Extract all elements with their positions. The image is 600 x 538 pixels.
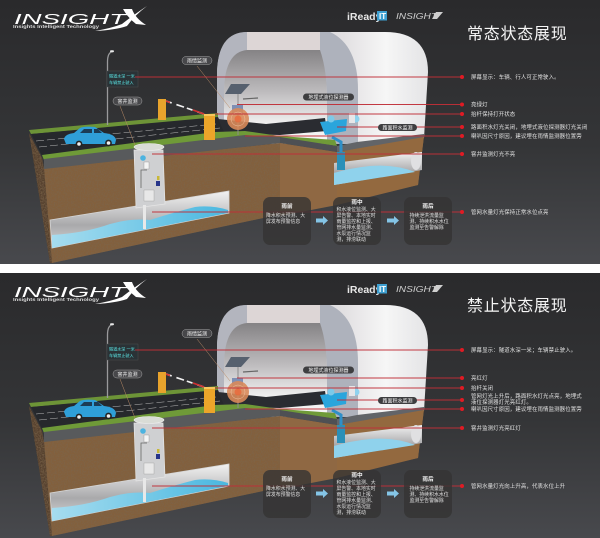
card: before rain: 雨前 xyxy=(281,202,293,210)
callout texts xyxy=(471,346,582,490)
water sensor and pump xyxy=(320,113,360,170)
label: buried level sensor xyxy=(303,366,354,374)
label: road water monitor xyxy=(378,124,417,132)
label: road water monitor: 路面积水监测 xyxy=(382,124,413,132)
callout texts: 窨井监测灯光不亮 xyxy=(471,150,516,158)
road sign: 车辆禁止驶入 xyxy=(109,352,134,358)
road sign: 隧道水深 一米 xyxy=(109,72,135,78)
tunnel hood xyxy=(217,305,428,417)
card: before rain: 降水积水预测、大 xyxy=(266,485,305,492)
callout texts: 抬杆保持打开状态 xyxy=(471,110,516,118)
label: rain monitor: 雨情监测 xyxy=(187,58,207,64)
card: after rain: 持续泄洪流量监 xyxy=(410,485,444,492)
road sign xyxy=(107,71,138,87)
label: manhole monitor: 窨井监测 xyxy=(117,371,138,378)
logo: InsightX xyxy=(13,279,147,304)
label: road water monitor xyxy=(378,397,417,404)
card: before rain xyxy=(263,470,311,518)
street lamp xyxy=(108,50,114,125)
callout texts: 窨井监测灯光亮红灯 xyxy=(471,424,521,432)
callout lines xyxy=(135,77,462,212)
card: before rain xyxy=(263,197,311,245)
callout texts: 喇叭因尺寸原因，建议埋在雨情监测器位置旁 xyxy=(471,132,582,140)
logo: InsightX: INSIGHT xyxy=(14,11,129,28)
street lamp xyxy=(108,323,114,398)
card: after rain: 雨后 xyxy=(422,202,434,210)
road sign xyxy=(107,344,138,360)
callout texts: 管网灯光上升后，路面积水灯光点亮，地埋式 xyxy=(471,392,582,400)
label: buried level sensor: 地埋式液位探测器 xyxy=(308,94,349,101)
label: buried level sensor xyxy=(303,94,354,101)
callout texts: 亮绿灯 xyxy=(471,100,488,108)
card: before rain: 降水积水预测、大 xyxy=(266,212,305,219)
panel: prohibited state xyxy=(0,273,600,538)
callout texts: 管网水量灯光向上升高，代表水位上升 xyxy=(471,482,566,490)
label: road water monitor: 路面积水监测 xyxy=(382,398,413,404)
label: manhole monitor: 窨井监测 xyxy=(117,98,138,105)
title: 常态状态展现 xyxy=(467,25,568,43)
arrow xyxy=(316,489,328,498)
solar monitor and horn xyxy=(225,357,258,408)
drainage pipes and manhole xyxy=(50,144,422,248)
callout texts: 屏幕显示：隧道水深一米；车辆禁止驶入。 xyxy=(471,346,576,354)
callout texts: 路面积水灯光关闭，地埋式液位探测器灯光关闭 xyxy=(471,123,587,131)
logo: iReady IT: IT xyxy=(379,12,386,21)
card: during rain: 屏告警、本地实时 xyxy=(336,485,376,492)
label: manhole monitor xyxy=(113,97,142,145)
callout dots xyxy=(460,348,464,488)
card: after rain: 持续泄洪流量监 xyxy=(410,212,444,219)
solar monitor and horn xyxy=(225,84,258,135)
ground cross-section and road xyxy=(29,386,424,536)
logo: iReady IT: INSIGHT xyxy=(396,12,438,21)
ground cross-section and road xyxy=(29,113,424,263)
callout texts: 屏幕显示：车辆、行人可正常驶入。 xyxy=(471,73,560,81)
callout texts: 抬杆关闭 xyxy=(471,384,493,392)
callout texts: 管网水量灯光保持正常水位点亮 xyxy=(471,208,549,216)
label: rain monitor xyxy=(182,56,230,108)
drainage pipes and manhole xyxy=(50,416,422,521)
card: during rain xyxy=(333,197,381,245)
label: rain monitor: 雨情监测 xyxy=(187,330,207,338)
logo: iReady IT: IT xyxy=(379,285,386,294)
card: during rain: 雨中 xyxy=(351,471,363,479)
logo: InsightX: Insights Intelligent Technology xyxy=(13,24,99,30)
arrow xyxy=(387,489,399,498)
card: during rain: 雨量监控和上报、 xyxy=(336,491,376,498)
card: during rain: 雨中 xyxy=(351,198,363,206)
tunnel hood xyxy=(217,32,428,144)
card: during rain: 管网排水量监测、 xyxy=(336,497,376,504)
callout texts: 亮红灯 xyxy=(471,374,488,382)
card: during rain: 屏告警、本地实时 xyxy=(336,212,376,219)
card: during rain: 管网排水量监测、 xyxy=(336,224,376,231)
label: buried level sensor: 地埋式液位探测器 xyxy=(308,367,349,374)
callout texts: 液位探测器灯光亮红灯。 xyxy=(471,398,532,406)
logo: iReady IT xyxy=(347,11,443,23)
logo: InsightX: INSIGHT xyxy=(14,284,129,301)
callout texts: 喇叭因尺寸原因，建议埋在雨情监测器位置旁 xyxy=(471,405,582,413)
card: after rain xyxy=(404,470,452,518)
logo: InsightX xyxy=(13,6,147,31)
card: during rain: 水泵运行情况监 xyxy=(336,503,371,510)
water sensor and pump xyxy=(320,386,360,443)
card: during rain: 积水液位监测、大 xyxy=(336,206,376,213)
card: before rain: 屏发布预警信息 xyxy=(266,218,300,225)
label: rain monitor xyxy=(182,330,230,381)
logo: iReady IT: INSIGHT xyxy=(396,285,438,294)
logo: iReady IT xyxy=(347,284,443,296)
barrier gate xyxy=(158,99,215,140)
logo: iReady IT: iReady xyxy=(347,11,382,23)
road sign: 隧道水深 一米 xyxy=(109,346,135,352)
card: during rain: 测，排涝联动 xyxy=(336,236,366,243)
label: manhole monitor xyxy=(113,370,142,418)
logo: iReady IT: iReady xyxy=(347,284,382,296)
card: after rain xyxy=(404,197,452,245)
panel: normal state xyxy=(0,0,600,264)
card: during rain: 积水液位监测、大 xyxy=(336,479,376,486)
barrier gate xyxy=(158,372,215,413)
callout dots xyxy=(460,75,464,214)
card: during rain xyxy=(333,470,381,518)
callout lines xyxy=(135,350,462,486)
card: during rain: 测，排涝联动 xyxy=(336,509,366,516)
card: before rain: 屏发布预警信息 xyxy=(266,491,300,498)
callout texts xyxy=(471,73,587,216)
logo: InsightX: Insights Intelligent Technology xyxy=(13,297,99,303)
card: during rain: 雨量监控和上报、 xyxy=(336,218,376,225)
road sign: 车辆禁止驶入 xyxy=(109,79,134,85)
car xyxy=(64,127,116,147)
card: after rain: 雨后 xyxy=(422,475,434,483)
card: after rain: 监测至告警解除 xyxy=(410,224,444,231)
card: before rain: 雨前 xyxy=(281,475,293,483)
card: during rain: 水泵运行情况监 xyxy=(336,230,371,237)
arrow xyxy=(387,216,399,225)
card: after rain: 监测至告警解除 xyxy=(410,497,444,504)
title: 禁止状态展现 xyxy=(467,297,568,315)
card: after rain: 测、持续积水水位 xyxy=(410,218,449,225)
arrow xyxy=(316,216,328,225)
card: after rain: 测、持续积水水位 xyxy=(410,491,449,498)
car xyxy=(64,400,116,420)
